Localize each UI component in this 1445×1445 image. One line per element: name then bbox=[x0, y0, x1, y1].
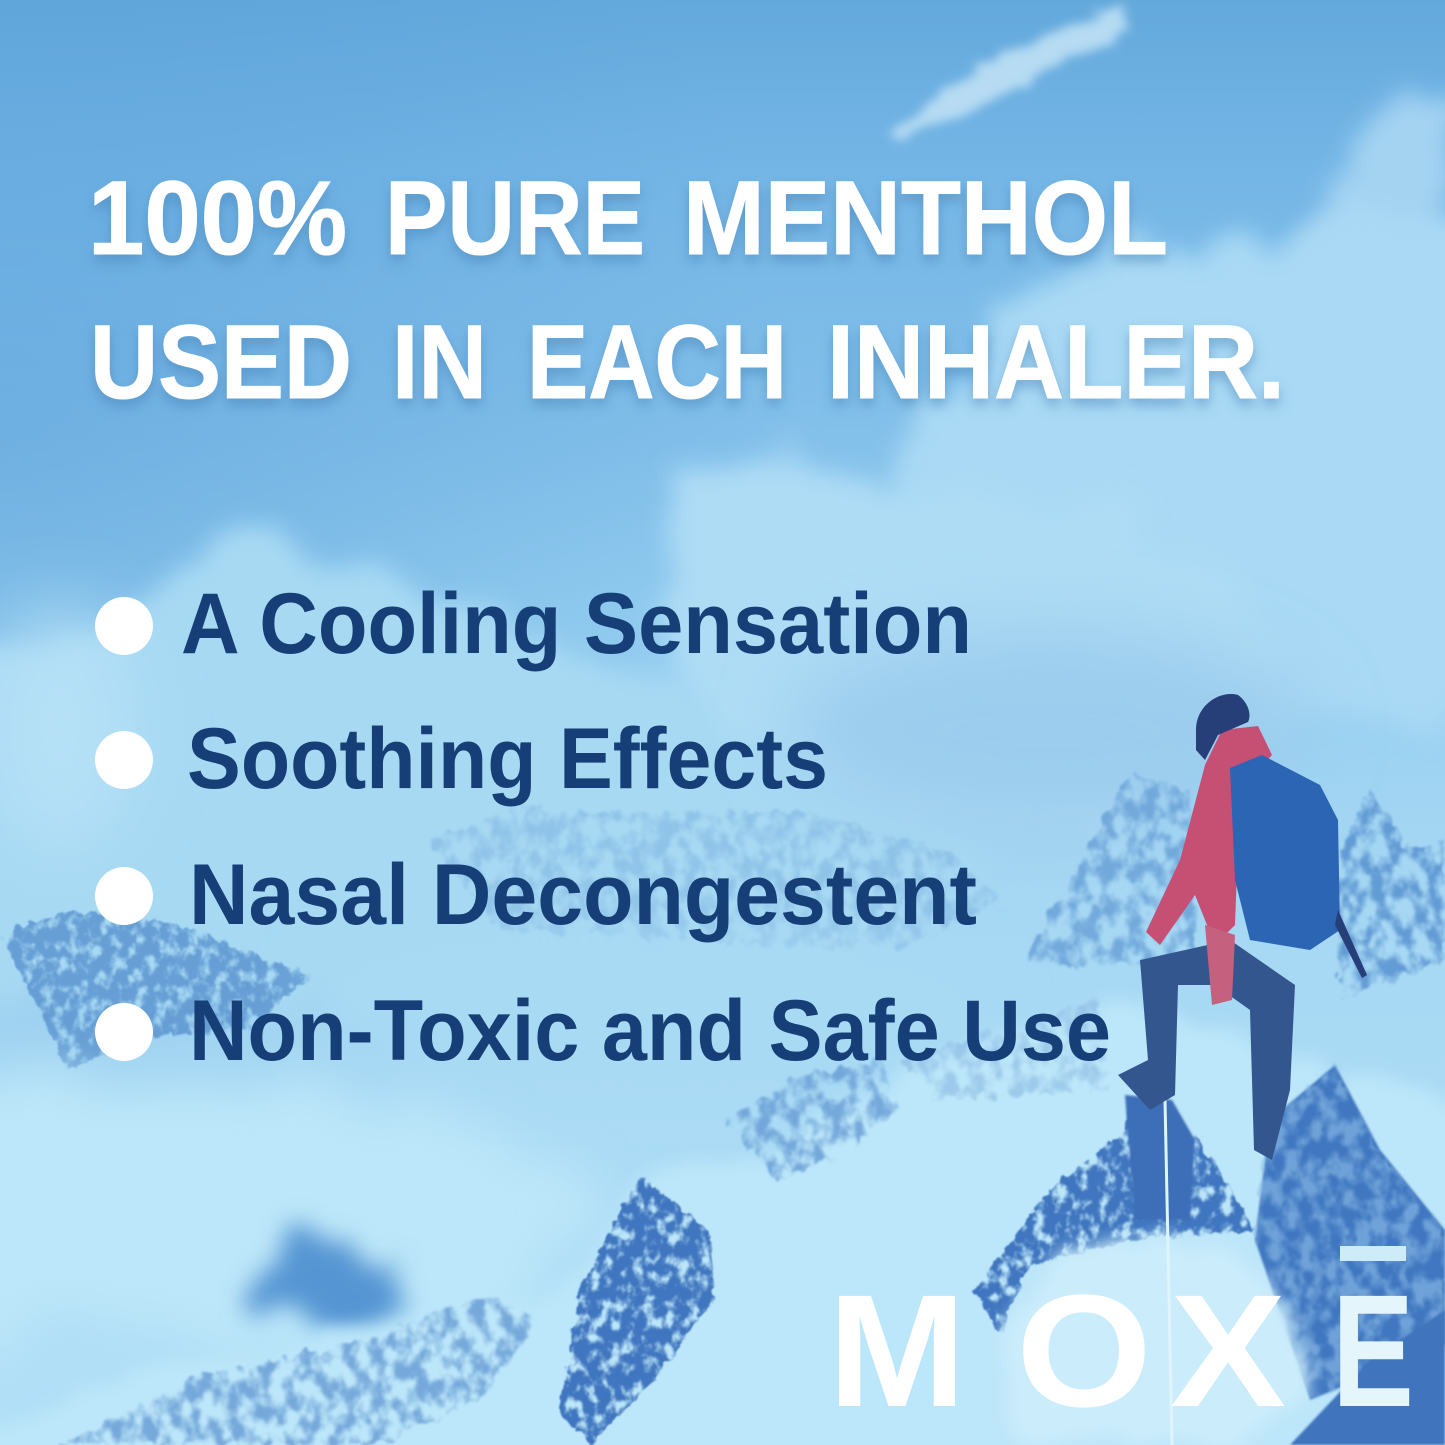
heading: MENTHOL bbox=[683, 160, 1168, 277]
background: snow mountain range bbox=[0, 1000, 1445, 1445]
heading bbox=[88, 160, 1285, 421]
heading: IN bbox=[392, 304, 487, 421]
benefits list bbox=[95, 576, 1111, 1079]
heading: 100% bbox=[88, 160, 347, 277]
logo: MOXE: E bbox=[1332, 1261, 1414, 1440]
logo: MOXE: M bbox=[828, 1261, 966, 1440]
bullet: non-toxic and safe use: Non-Toxic and Safe Use bbox=[189, 983, 1111, 1079]
climber: jacket bbox=[1146, 726, 1272, 945]
bullet: soothing effects: Soothing Effects bbox=[187, 711, 828, 807]
logo macron bbox=[1340, 1246, 1406, 1261]
logo: MOXE bbox=[828, 1246, 1414, 1440]
climber: backpack bbox=[1230, 755, 1340, 950]
background: lower clouds bbox=[0, 945, 980, 1350]
climber: harness bbox=[1205, 925, 1235, 1005]
heading: EACH bbox=[527, 304, 787, 421]
background: clouds bbox=[0, 10, 1445, 1000]
heading: PURE bbox=[385, 160, 645, 277]
logo: MOXE: O bbox=[1016, 1261, 1152, 1440]
heading: INHALER. bbox=[827, 304, 1285, 421]
climber bbox=[1118, 694, 1367, 1160]
background: distant mountains bbox=[0, 775, 1445, 1070]
heading: USED bbox=[90, 304, 352, 421]
climber: helmet bbox=[1196, 694, 1250, 760]
climber: legs bbox=[1118, 940, 1295, 1160]
bullet: nasal decongestent: Nasal Decongestent bbox=[189, 847, 977, 943]
bullet: a cooling sensation: A Cooling Sensation bbox=[181, 576, 972, 672]
logo: MOXE: X bbox=[1170, 1261, 1286, 1440]
